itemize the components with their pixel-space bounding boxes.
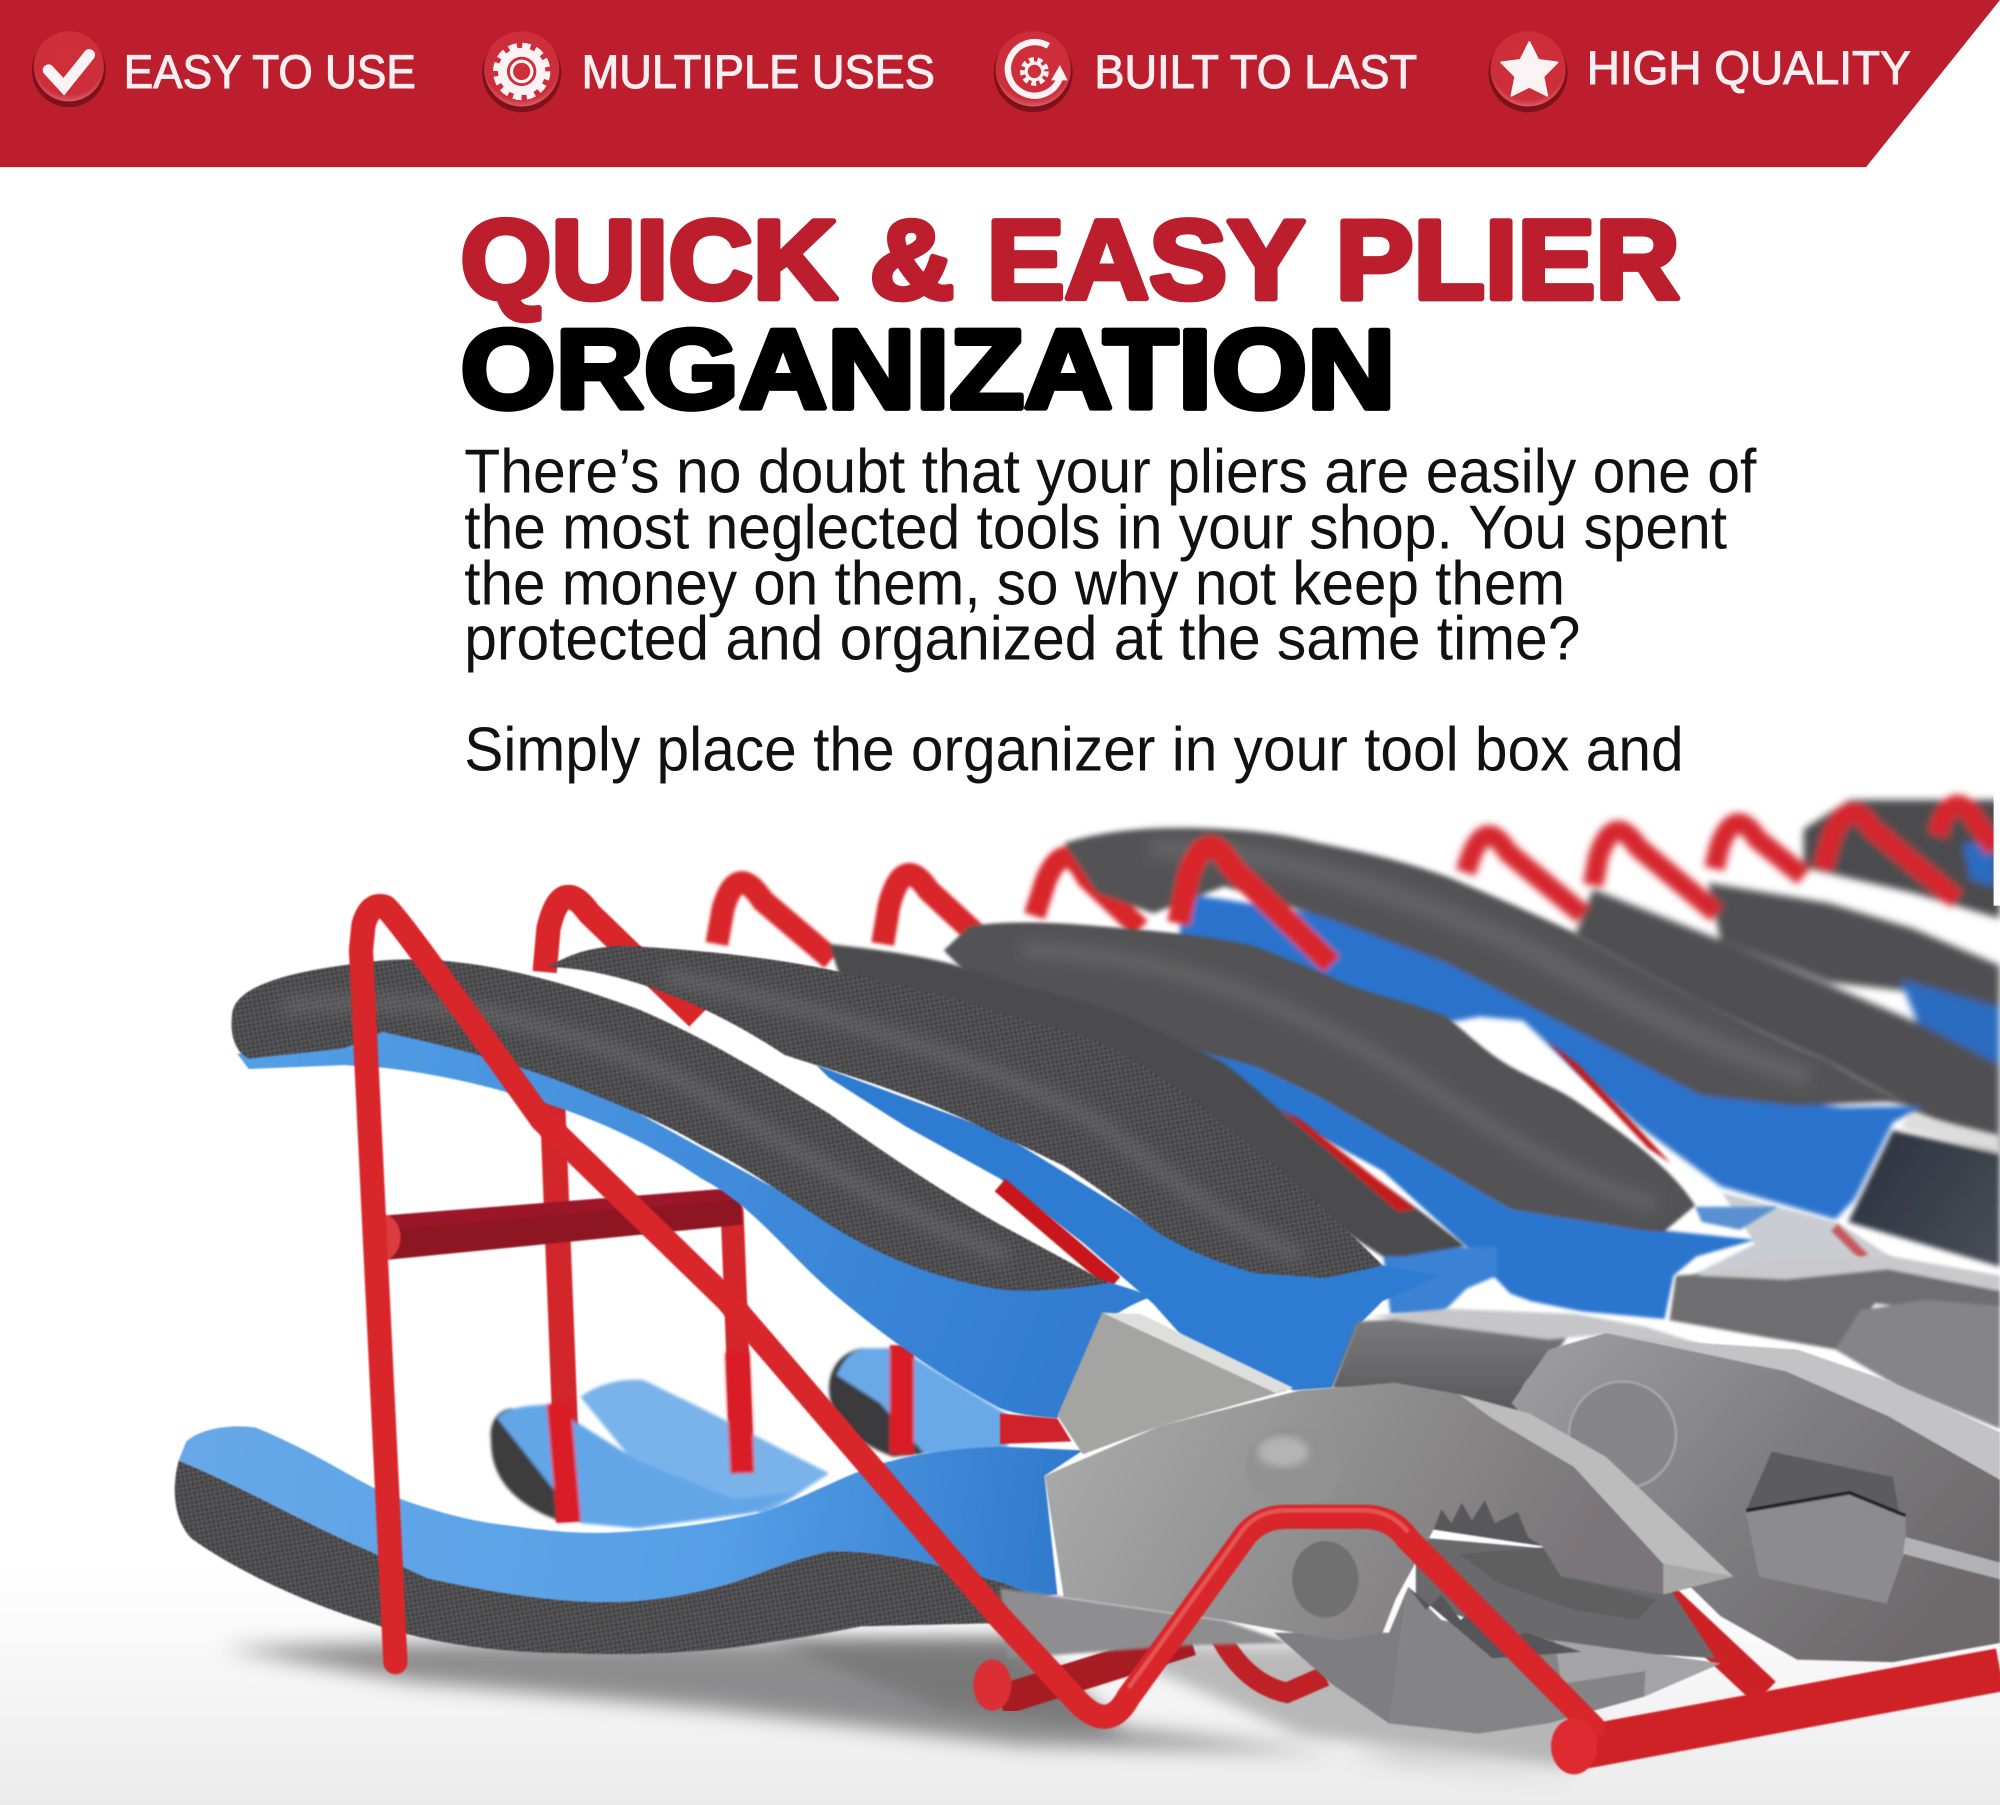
- icon: check mark: [32, 31, 106, 107]
- back lower handle 2: [829, 1348, 1000, 1457]
- wire end cap rear: [973, 1660, 1011, 1711]
- title line 1: QUICK & EASY PLIER: [460, 196, 1680, 322]
- lower blue: [179, 1426, 1083, 1602]
- jaw edge highlight: [1459, 1394, 1733, 1577]
- label: multiple uses: MULTIPLE USES: [582, 46, 935, 99]
- B crest highlight: [663, 976, 1301, 1256]
- lower jaw arc: [1274, 1587, 1408, 1723]
- icon: star: [1489, 31, 1568, 112]
- far plier I: [1804, 800, 2000, 918]
- rail: [1582, 1670, 2000, 1748]
- arch wire D: [883, 874, 1031, 985]
- far plier H blue: [1901, 980, 2000, 1069]
- far wire loops: [1466, 805, 1995, 915]
- third plier neck highlight: [1696, 1256, 2000, 1291]
- lower handles of back pliers: [491, 1346, 1008, 1528]
- upright wires: [552, 1097, 902, 1522]
- shadow metal behind teeth: [1459, 1546, 1657, 1620]
- second plier neck: [1332, 1314, 1574, 1418]
- second plier head: [1511, 1333, 2000, 1662]
- front rack frame wire: [361, 906, 2000, 1774]
- handle blue A: [237, 1027, 1153, 1418]
- wire in gap F-D: [1546, 1040, 1671, 1163]
- product photo: plier organizer rack: [0, 785, 2000, 1805]
- plier D: [883, 874, 1778, 1319]
- cross bar: [365, 1188, 742, 1260]
- far plier G: [1574, 889, 2000, 1154]
- handle blue D: [1153, 1029, 1755, 1319]
- stripes between caps: [1684, 1193, 1901, 1279]
- floor and shadow: [0, 1569, 2000, 1805]
- title: [460, 196, 1680, 432]
- body text: the money on them, so why not keep them: [464, 549, 1565, 619]
- handle blue B: [816, 1065, 1440, 1390]
- right edge sliver: [1994, 785, 2000, 906]
- uprights over back handles: [559, 1346, 902, 1522]
- red wedge between caps: [1000, 1413, 1071, 1444]
- body text: [464, 436, 1757, 784]
- far plier H: [1708, 883, 2000, 1020]
- front plier head: [1045, 1313, 1733, 1734]
- label: built to last: BUILT TO LAST: [1094, 46, 1417, 99]
- tip of plier E: [1695, 1207, 1778, 1230]
- loop: [1217, 1630, 1325, 1693]
- back lower handle 1 dark: [491, 1408, 638, 1522]
- banner shape: [0, 0, 2000, 167]
- arch wire, plier F far: [1034, 857, 1140, 929]
- wire highlight: [1129, 1510, 1408, 1688]
- handle dark B: [548, 946, 1383, 1278]
- lower teeth: [1408, 1587, 1582, 1658]
- wire end cap front: [1551, 1718, 1597, 1774]
- wire behind front head: [1000, 1597, 1765, 1700]
- handle dark D: [944, 923, 1695, 1232]
- arch wire F: [1179, 847, 1332, 964]
- title line 2: ORGANIZATION: [460, 306, 1395, 432]
- upper jaw: [1045, 1383, 1733, 1640]
- arch wire C: [717, 883, 832, 959]
- lower right jaw crack: [1903, 1537, 2000, 1579]
- backing metal behind jaws: [1416, 1537, 1716, 1658]
- second wire: [1663, 1597, 1765, 1693]
- icon: circular arrow with gear: [994, 31, 1073, 112]
- plier F: [1034, 828, 2000, 1267]
- steel neck highlight: [1901, 1114, 2000, 1153]
- body text: protected and organized at the same time?: [464, 603, 1580, 673]
- back lower handle 2 blue: [837, 1348, 1008, 1454]
- wire in gap D-C: [1281, 1110, 1416, 1212]
- A crest highlight: [281, 1002, 1008, 1256]
- jaw opening: [1746, 1452, 1906, 1603]
- label: high quality: HIGH QUALITY: [1587, 42, 1911, 95]
- handle blue F: [1180, 893, 1925, 1219]
- wire in gap B-A: [1000, 1185, 1115, 1283]
- gap details behind heads: [1546, 1040, 1901, 1279]
- gray strip under front head: [1000, 1588, 1288, 1658]
- upper teeth: [1434, 1500, 1542, 1546]
- upright, diagonal and wave: [361, 906, 1593, 1727]
- lower dark: [175, 1461, 1046, 1654]
- plier B: [545, 897, 1440, 1390]
- back finger 2 blue: [580, 1380, 829, 1515]
- neck highlight: [1102, 1313, 1293, 1393]
- body text: the most neglected tools in your shop. You spent: [464, 493, 1727, 563]
- rivet: [1246, 1426, 1341, 1508]
- label: easy to use: EASY TO USE: [124, 46, 416, 99]
- third plier neck: [1670, 1260, 2000, 1350]
- front plier upper handle: [232, 959, 1153, 1418]
- upper neck: [1057, 1313, 1287, 1454]
- handle dark F: [1064, 828, 1906, 1106]
- head highlight band: [1606, 1333, 2000, 1480]
- jaw tip face: [1663, 1564, 1733, 1595]
- handle dark C: [829, 944, 1466, 1256]
- far pliers, out of focus: [1466, 800, 2000, 1154]
- back finger 1 blue: [497, 1404, 797, 1528]
- arch wire B: [545, 897, 698, 1018]
- handle blue tip C: [1383, 1246, 1497, 1314]
- lower jaw: [1389, 1587, 1721, 1734]
- third plier head: [1835, 1300, 2000, 1429]
- D crest highlight: [1020, 950, 1658, 1205]
- header banner: [0, 0, 2000, 167]
- steel neck: [1848, 1130, 2000, 1267]
- icon: gear: [482, 31, 561, 112]
- F crest highlight: [1148, 848, 1811, 1078]
- plier C: [717, 883, 1497, 1314]
- front plier lower handle: [175, 1413, 1083, 1654]
- lower jaw flat: [1555, 1640, 1721, 1697]
- body text: Simply place the organizer in your tool box and: [464, 714, 1684, 784]
- handle dark A: [232, 959, 1108, 1291]
- third and second plier necks: [1332, 1256, 2000, 1429]
- body text: There’s no doubt that your pliers are easily one of: [464, 436, 1757, 506]
- dark rail: [1000, 1640, 1191, 1700]
- pivot ring: [1569, 1381, 1676, 1489]
- hole: [1292, 1541, 1358, 1617]
- second plier neck highlight: [1371, 1309, 1709, 1347]
